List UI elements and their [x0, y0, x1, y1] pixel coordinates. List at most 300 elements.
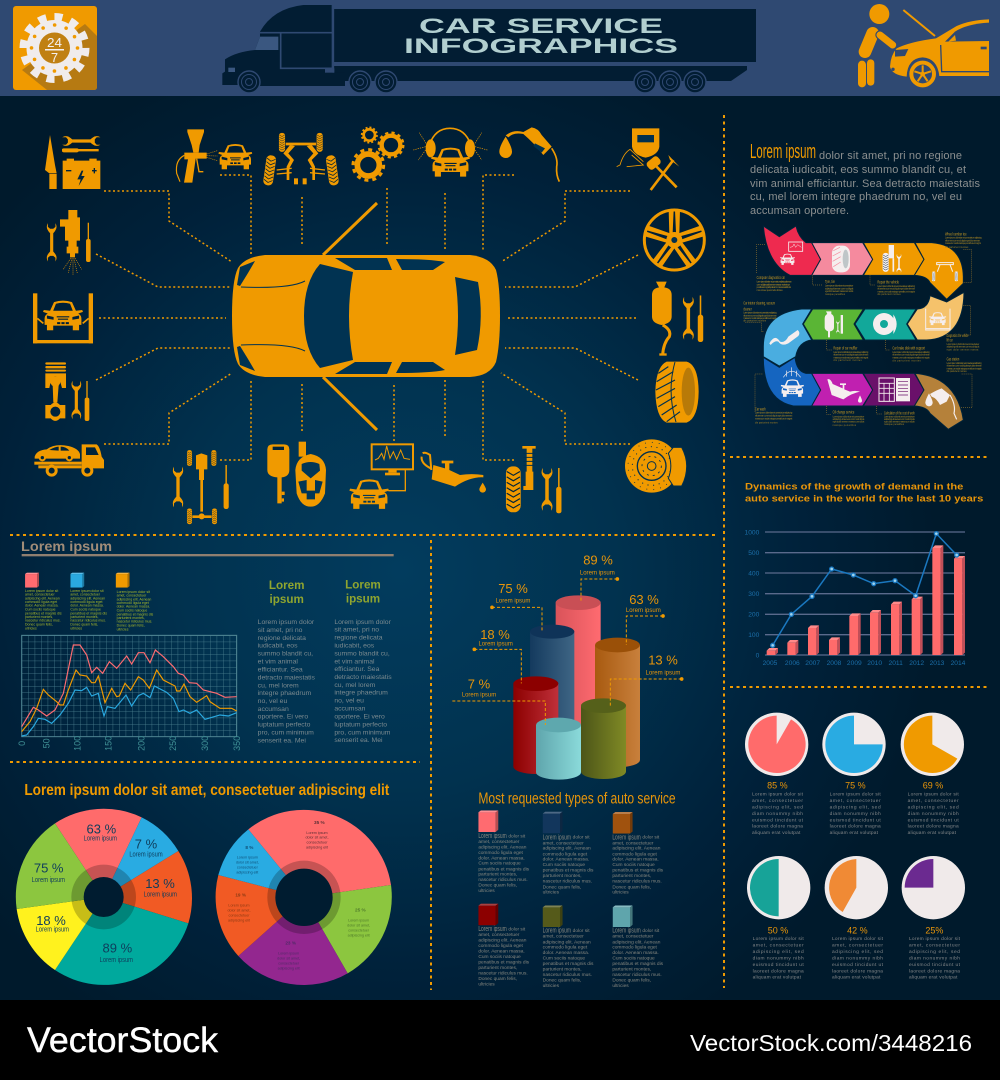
icon: car key and alarm remote	[267, 442, 326, 507]
legend: Lorem ipsum dolor sit	[25, 589, 58, 593]
panel: service road diagram: mus donec quam felis ultricies	[757, 289, 783, 292]
callout labels: 89 %	[583, 553, 613, 568]
footer watermark band: VectorStock	[27, 1021, 219, 1060]
road icons	[769, 242, 958, 419]
section separators	[10, 115, 990, 990]
pie 69 percent: aliquam erat volutpat	[908, 830, 957, 836]
panel: service road diagram: elit aenean commodo ligula eget dolor aenean	[947, 365, 982, 368]
legend: dolor. Aenean massa.	[117, 605, 150, 609]
heading: Lorem ipsum dolor sit amet, consectetuer adipiscing elit	[24, 782, 389, 799]
heading: Lorem ipsum	[21, 538, 112, 554]
icon: strut, tire and tools	[506, 446, 561, 513]
legend texts: nascetur ridiculus mus.	[612, 972, 662, 978]
donut chart right: dolor sit amet,	[236, 861, 259, 865]
donut chart right: consectetuer	[237, 866, 259, 870]
grid and axis: 2012	[909, 660, 924, 667]
text column 1: et vim animal	[258, 659, 298, 666]
legend: dolor. Aenean massa.	[25, 604, 59, 608]
pie 42 percent: 42 %	[847, 925, 868, 935]
panel: most requested types	[478, 790, 676, 989]
legend texts: Cum sociis natoque	[543, 955, 585, 961]
legend texts: ultricies	[543, 890, 560, 896]
panel: service road diagram: Lorem ipsum dolor sit amet consectetuer adipiscing	[892, 351, 930, 354]
pie 69 percent: euismod tincidunt ut	[908, 817, 959, 823]
callout labels: Lorem ipsum	[495, 598, 531, 605]
text column 1: Lorem ipsum dolor	[258, 619, 315, 626]
legend texts: adipiscing elit. Aenean	[478, 938, 527, 944]
heading: Dynamics of the growth of demand in the	[745, 481, 963, 491]
legend texts: dolor sit	[573, 928, 590, 934]
legend texts: penatibus et magnis dis	[612, 961, 664, 967]
legend texts: adipiscing elit. Aenean	[612, 846, 661, 852]
chart: 200	[136, 736, 146, 751]
text column 1: integre phaedrum	[258, 690, 311, 697]
pie 69 percent	[901, 713, 964, 836]
pie 42 percent: euismod tincidunt ut	[832, 962, 884, 968]
panel: service road diagram: dis parturient montes	[945, 246, 969, 249]
donut chart right: 23 %	[285, 941, 297, 946]
chart: 150	[104, 736, 114, 751]
legend: commodo ligula eget	[117, 601, 149, 605]
text column 2: regione delicata	[334, 635, 383, 642]
panel: service road diagram: dis parturient montes	[833, 359, 862, 362]
legend texts: parturient montes,	[543, 873, 582, 879]
legend texts: ultricies	[478, 888, 495, 894]
panel: service road diagram: lift car	[947, 338, 953, 343]
legend texts: amet, consectetuer	[612, 934, 654, 940]
legend texts: ultricies	[543, 983, 560, 989]
donut chart right: dolor sit amet,	[228, 909, 250, 913]
pie 50 percent: aliquam erat volutpat	[753, 975, 802, 981]
legend texts: dolor sit	[642, 835, 660, 841]
pie 25 percent	[902, 856, 965, 981]
text column 2: efficiantur. Sea	[334, 666, 380, 673]
legend texts: Donec quam felis,	[612, 884, 651, 890]
grid and axis: 0	[756, 652, 760, 659]
grid and axis: 300	[748, 591, 760, 598]
text column 1: detracto maiestatis	[258, 674, 316, 681]
donut chart left: 18 %	[36, 913, 66, 928]
icon: car lift	[33, 293, 93, 343]
legend: commodo ligula eget	[70, 600, 103, 604]
donut chart right: dolor sit amet,	[306, 836, 328, 840]
panel: 3D cylinder chart	[452, 553, 683, 780]
legend: Cum sociis natoque	[70, 607, 101, 611]
donut chart right: Lorem ipsum	[228, 904, 250, 908]
icon: injector and tools	[47, 210, 91, 275]
text column 2: cu, mel lorem	[334, 682, 376, 689]
panel: service road diagram: Lorem ipsum dolor sit amet consectetuer adipiscing	[877, 285, 916, 288]
panel: intro text: delicata iudicabit, eos summo blandit cu, et	[750, 164, 966, 176]
footer watermark band	[0, 1000, 1000, 1080]
text column 2: oportere. Ei vero	[334, 713, 385, 720]
donut chart right: adipiscing elit	[348, 934, 370, 938]
text column 2: sit amet, pri no	[334, 627, 379, 634]
donut chart right: dolor sit amet,	[347, 924, 370, 928]
pie 50 percent: Lorem ipsum dolor sit	[753, 936, 804, 942]
pie 42 percent	[825, 856, 888, 981]
legend texts: Donec quam felis,	[543, 884, 581, 890]
panel: service road diagram: adipiscing elit aenean commodo ligula	[884, 418, 915, 421]
panel: service road diagram: natoque penatibus	[825, 293, 846, 296]
legend: commodo ligula eget	[25, 600, 57, 604]
icon: alloy wheel	[644, 210, 705, 270]
panel: service road diagram: Calculation of the cost of work	[884, 410, 915, 415]
text column 2: luptatum perfecto	[334, 721, 387, 728]
legend: Donec quam felis,	[70, 623, 98, 627]
legend: dolor. Aenean massa.	[70, 604, 104, 608]
pie 42 percent: aliquam erat volutpat	[832, 975, 881, 981]
panel: service road diagram: Diagnostics the vehicle	[947, 333, 969, 338]
legend texts: Donec quam felis,	[478, 976, 517, 982]
donut chart right: consectetuer	[229, 914, 250, 918]
legend texts: amet, consectetuer	[543, 934, 584, 940]
legend cubes	[478, 810, 633, 927]
panel: service road diagram: dis parturient montes	[947, 370, 967, 373]
legend texts: nascetur ridiculus mus.	[543, 972, 592, 978]
callout labels: 18 %	[480, 627, 510, 642]
pie 69 percent: diam nonummy nibh	[908, 811, 959, 817]
panel: service road diagram: Lorem ipsum dolor sit amet consectetuer	[833, 415, 865, 418]
trend line	[771, 532, 959, 647]
icon: axle and tools	[173, 450, 229, 524]
text column 2: summo blandit cu,	[334, 650, 390, 657]
legend texts: dolor. Aenean massa.	[478, 855, 525, 861]
text column 2: accumsan	[334, 706, 366, 713]
text column 1: ipsum	[269, 593, 304, 606]
pie 42 percent: Lorem ipsum dolor sit	[832, 936, 884, 942]
pie 50 percent: euismod tincidunt ut	[753, 962, 804, 968]
icon: car top view	[232, 203, 500, 430]
panel: service road diagram: dis parturient montes	[892, 360, 921, 363]
legend texts: adipiscing elit. Aenean	[478, 844, 527, 850]
icon: monitor and car	[349, 444, 413, 509]
callout labels: Lorem ipsum	[645, 669, 681, 676]
panel: service road diagram: adipiscing elit aenean commodo ligula	[833, 418, 865, 421]
text column 1: regione delicata	[258, 635, 306, 642]
chart: 250	[168, 736, 178, 751]
panel: service road diagram: dis parturient montes	[877, 293, 901, 296]
text column 2: no, vel eu	[334, 698, 364, 705]
panel: service road diagram: Lorem ipsum dolor sit amet consectetuer	[825, 285, 854, 288]
legend texts: nascetur ridiculus mus.	[478, 877, 528, 883]
pie 75 percent: aliquam erat volutpat	[830, 830, 879, 836]
pie 85 percent	[745, 713, 808, 836]
legend texts: commodo ligula eget	[612, 851, 658, 857]
panel: service road diagram: elit aenean commodo ligula eget dolor aenean	[892, 354, 930, 357]
legend texts: penatibus et magnis dis	[478, 866, 530, 872]
pie 85 percent: Lorem ipsum dolor sit	[752, 792, 804, 798]
pie 69 percent: adipiscing elit, sed	[908, 805, 959, 811]
donut chart right: consectetuer	[348, 929, 370, 933]
donut chart left: 75 %	[34, 860, 64, 875]
panel: demand growth bar chart	[745, 481, 983, 667]
chart: 350	[232, 736, 242, 751]
panel: service road diagram: adipiscing elit aenean commodo ligula	[947, 346, 980, 349]
header band	[0, 0, 1000, 96]
title: INFOGRAPHICS	[404, 35, 678, 58]
panel: service road diagram: cleaner	[743, 306, 752, 311]
text column 1: senserit ea. Mei	[258, 737, 306, 744]
panel: service road diagram: Repair the vehicle	[877, 279, 899, 284]
legend texts: Cum sociis natoque	[612, 955, 655, 961]
callout labels: 75 %	[498, 581, 528, 596]
text column 1: luptatum perfecto	[258, 722, 311, 729]
pie 25 percent: laoreet dolore magna	[909, 968, 960, 974]
pie 25 percent: amet, consectetuer	[909, 943, 960, 949]
pie 69 percent: laoreet dolore magna	[908, 824, 959, 830]
legend texts: ultricies	[612, 890, 629, 896]
pie 25 percent: 25%	[925, 925, 943, 935]
legend texts: amet, consectetuer	[478, 839, 520, 845]
panel: service road diagram: Oil change service	[833, 410, 855, 415]
legend texts: amet, consectetuer	[612, 840, 654, 846]
donut chart left: Lorem ipsum	[129, 851, 163, 858]
text column 2: pro, cum minimum	[334, 729, 391, 736]
pie 75 percent	[822, 713, 886, 836]
text column 2: iudicabit, eos	[334, 642, 375, 649]
pie 50 percent: 50 %	[768, 925, 788, 935]
chart: 0	[17, 741, 27, 746]
icon: muffler and tools	[652, 282, 703, 356]
panel: service road diagram: natoque penatibus	[833, 424, 857, 427]
text column 2: detracto maiestatis	[334, 674, 392, 681]
legend texts: parturient montes,	[478, 872, 517, 878]
legend texts: dolor. Aenean massa.	[543, 857, 589, 863]
legend texts: Lorem ipsum	[478, 924, 507, 933]
panel: service road diagram: natoque penatibus	[884, 423, 905, 426]
pie 50 percent	[747, 856, 810, 981]
donut chart left: Lorem ipsum	[36, 927, 69, 934]
panel: service road diagram: adipiscing elit aenean commodo ligula	[825, 287, 854, 290]
legend texts: dolor sit	[508, 926, 526, 932]
panel: service road diagram: Car wash	[755, 406, 766, 411]
legend texts: dolor. Aenean massa.	[612, 857, 659, 863]
panel: service road diagram: Computer diagnostics car	[757, 275, 785, 280]
panel: intro text: accumsan oportere.	[750, 205, 849, 217]
legend texts: Lorem ipsum	[543, 926, 571, 935]
pie 69 percent: amet, consectetuer	[908, 798, 959, 804]
panel: service road diagram: eget dolor aenean massa	[947, 348, 979, 351]
legend: parturient montes,	[117, 616, 145, 620]
chart: 100	[73, 736, 83, 751]
heading: auto service in the world for the last 10 years	[745, 494, 983, 504]
pie 69 percent: 69 %	[923, 781, 943, 791]
pie 25 percent: euismod tincidunt ut	[909, 962, 961, 968]
donut chart left: 13 %	[145, 876, 175, 891]
legend texts: Donec quam felis,	[478, 883, 517, 889]
icon: piston and tools	[45, 362, 89, 421]
grid and axis	[745, 529, 966, 667]
pie 50 percent: adipiscing elit, sed	[753, 949, 804, 955]
panel: service road diagram: elit aenean commodo ligula eget dolor aenean	[743, 314, 777, 317]
legend: ultricies	[70, 626, 82, 630]
panel: service road diagram: Lorem ipsum dolor sit amet consectetuer adipiscing	[755, 412, 793, 415]
panel: service road diagram: massa cum sociis natoque penatibus et magnis	[877, 290, 916, 293]
text column 2: Lorem ipsum dolor	[334, 619, 392, 626]
callout labels: 7 %	[468, 676, 491, 691]
heading	[745, 481, 983, 504]
grid and axis: 2010	[867, 660, 882, 667]
panel: intro text: vim animal efficiantur. Sea detracto maiestatis	[750, 178, 980, 190]
legend texts: Donec quam felis,	[543, 978, 581, 984]
grid and axis: 2013	[930, 660, 945, 667]
panel: service road diagram: Lorem ipsum dolor sit amet consectetuer adipiscing	[945, 237, 982, 240]
callout labels: Lorem ipsum	[580, 570, 615, 577]
panel: service road diagram: elit aenean commodo ligula eget dolor aenean	[833, 354, 869, 357]
legend: Donec quam felis,	[25, 623, 53, 627]
panel: service road diagram: Wheel camber toe	[945, 231, 967, 236]
icon: gears	[353, 127, 403, 180]
text column 1: efficiantur. Sea	[258, 666, 303, 673]
grid and axis: 2009	[847, 660, 862, 667]
legend texts: dolor. Aenean massa.	[478, 949, 525, 955]
donut chart right: adipiscing elit	[228, 919, 250, 923]
legend: Lorem ipsum dolor sit	[117, 590, 150, 594]
pie 50 percent: amet, consectetuer	[753, 943, 804, 949]
donut chart left: Lorem ipsum	[84, 836, 117, 843]
legend: penatibus et magnis dis	[25, 611, 62, 615]
donut chart right	[216, 810, 392, 985]
text column 1: no, vel eu	[258, 698, 287, 705]
text column 1	[258, 579, 316, 744]
pie 85 percent: aliquam erat volutpat	[752, 830, 801, 836]
panel: service road diagram: eget dolor aenean massa cum sociis	[884, 421, 915, 424]
left side icons	[33, 129, 339, 524]
pie 85 percent: adipiscing elit, sed	[752, 805, 803, 811]
callout labels: Lorem ipsum	[462, 692, 497, 699]
donut chart right: 8 %	[245, 845, 254, 850]
panel: line chart with legend	[17, 538, 394, 751]
panel: service road diagram	[743, 226, 982, 429]
pie 42 percent: adipiscing elit, sed	[832, 949, 883, 955]
pie 50 percent: laoreet dolore magna	[753, 968, 804, 974]
callout labels: 13 %	[648, 653, 678, 668]
text column 1: sit amet, pri no	[258, 627, 303, 634]
icon: mechanic and car	[858, 4, 989, 89]
bars	[767, 545, 965, 655]
grid and axis: 2007	[805, 660, 820, 667]
pie 75 percent: amet, consectetuer	[830, 798, 881, 804]
footer watermark band: VectorStock.com/3448216	[690, 1030, 972, 1056]
grid and axis: 200	[748, 612, 760, 619]
donut chart right: consectetuer	[307, 841, 328, 845]
title: CAR SERVICE	[419, 15, 663, 38]
legend texts: Lorem ipsum	[612, 832, 641, 841]
panel: service road diagram: Tyre, tire	[825, 279, 835, 284]
text column 1: Lorem	[269, 579, 304, 592]
legend texts: amet, consectetuer	[478, 932, 520, 938]
grid and axis: 500	[748, 550, 760, 557]
panel: service road diagram: elit aenean commodo ligula eget dolor aenean	[755, 414, 793, 417]
panel: service road diagram: massa cum sociis natoque penatibus et magnis	[947, 367, 982, 370]
legend texts: dolor sit	[573, 835, 590, 841]
panel: service road diagram: Car interior cleaning, vacuum	[743, 300, 775, 305]
cylinders	[513, 595, 640, 780]
donut chart left: 89 %	[103, 940, 133, 955]
legend texts: adipiscing elit. Aenean	[543, 846, 591, 852]
donut chart right: 25 %	[355, 908, 366, 913]
legend texts: commodo ligula eget	[543, 851, 588, 857]
legend texts: dolor. Aenean massa.	[612, 950, 659, 956]
pie 75 percent: euismod tincidunt ut	[830, 817, 881, 823]
pie 75 percent: Lorem ipsum dolor sit	[830, 792, 881, 798]
legend: ultricies	[117, 627, 129, 631]
callout labels: 63 %	[629, 592, 659, 607]
legend texts: commodo ligula eget	[478, 850, 524, 856]
legend: parturient montes,	[25, 615, 53, 619]
legend: adipiscing elit. Aenean	[70, 596, 105, 600]
pie 85 percent: diam nonummy nibh	[752, 811, 803, 817]
donut chart left: Lorem ipsum	[144, 892, 177, 899]
panel: service road diagram: dis parturient montes	[755, 421, 778, 424]
legend texts: Cum sociis natoque	[612, 862, 655, 868]
text column 1: summo blandit cu,	[258, 651, 313, 658]
dotted connectors	[96, 175, 638, 460]
central service diagram	[33, 127, 705, 524]
text column 1: iudicabit, eos	[258, 643, 298, 650]
legend: nascetur ridiculus mus.	[117, 620, 152, 624]
legend: amet, consectetuer	[25, 593, 55, 597]
pie 25 percent: diam nonummy nibh	[909, 955, 960, 961]
donut chart right: Lorem ipsum	[348, 919, 369, 923]
icon: 24/7 service badge: 7	[51, 50, 58, 65]
legend texts: Lorem ipsum	[543, 832, 571, 841]
legend: ultricies	[25, 626, 37, 630]
panel: service road diagram: elit aenean commodo ligula eget dolor aenean	[877, 288, 916, 291]
donut chart left: 63 %	[87, 821, 117, 836]
pie 85 percent: laoreet dolore magna	[752, 824, 803, 830]
text column 2: senserit ea. Mei	[334, 737, 383, 744]
road captions	[745, 244, 972, 414]
legend texts: adipiscing elit. Aenean	[612, 939, 661, 945]
grid and axis: 2014	[951, 660, 966, 667]
pie 75 percent: diam nonummy nibh	[830, 811, 881, 817]
donut chart right: adipiscing elit	[306, 846, 328, 850]
callout lines	[452, 579, 682, 725]
legend texts: parturient montes,	[478, 965, 517, 971]
legend texts: parturient montes,	[612, 873, 651, 879]
panel: service road diagram: Lorem ipsum dolor sit amet consectetuer adipiscing	[947, 362, 982, 365]
legend: Cum sociis natoque	[25, 607, 56, 611]
grid and axis: 400	[748, 570, 760, 577]
pie 75 percent: laoreet dolore magna	[830, 824, 881, 830]
icon: tire	[655, 362, 699, 423]
legend texts: commodo ligula eget	[478, 943, 524, 949]
legend texts: Cum sociis natoque	[478, 861, 521, 867]
legend: amet, consectetuer	[70, 593, 101, 597]
chart: 50	[41, 738, 51, 748]
donut chart right: 35 %	[314, 820, 325, 825]
pie 42 percent: amet, consectetuer	[832, 943, 883, 949]
icon: welding mask and hammers	[617, 128, 679, 190]
pie 25 percent: Lorem ipsum dolor sit	[909, 936, 961, 942]
legend texts: Cum sociis natoque	[478, 954, 521, 960]
legend: parturient montes,	[70, 615, 98, 619]
pie 69 percent: Lorem ipsum dolor sit	[908, 792, 959, 798]
text column 1: cu, mel lorem	[258, 682, 299, 689]
chart: 300	[200, 736, 210, 751]
icon: battery and tools	[45, 135, 100, 189]
icon: fuel nozzle and drop	[499, 127, 559, 182]
legend texts: commodo ligula eget	[543, 945, 588, 951]
legend	[25, 573, 154, 631]
donut chart right: adipiscing elit	[236, 871, 258, 875]
panel: service road diagram: Car brake disk with support	[892, 345, 925, 350]
donut chart right: dolor sit amet,	[277, 957, 300, 961]
legend texts: Lorem ipsum	[478, 831, 507, 840]
text column 2: et vim animal	[334, 658, 375, 665]
